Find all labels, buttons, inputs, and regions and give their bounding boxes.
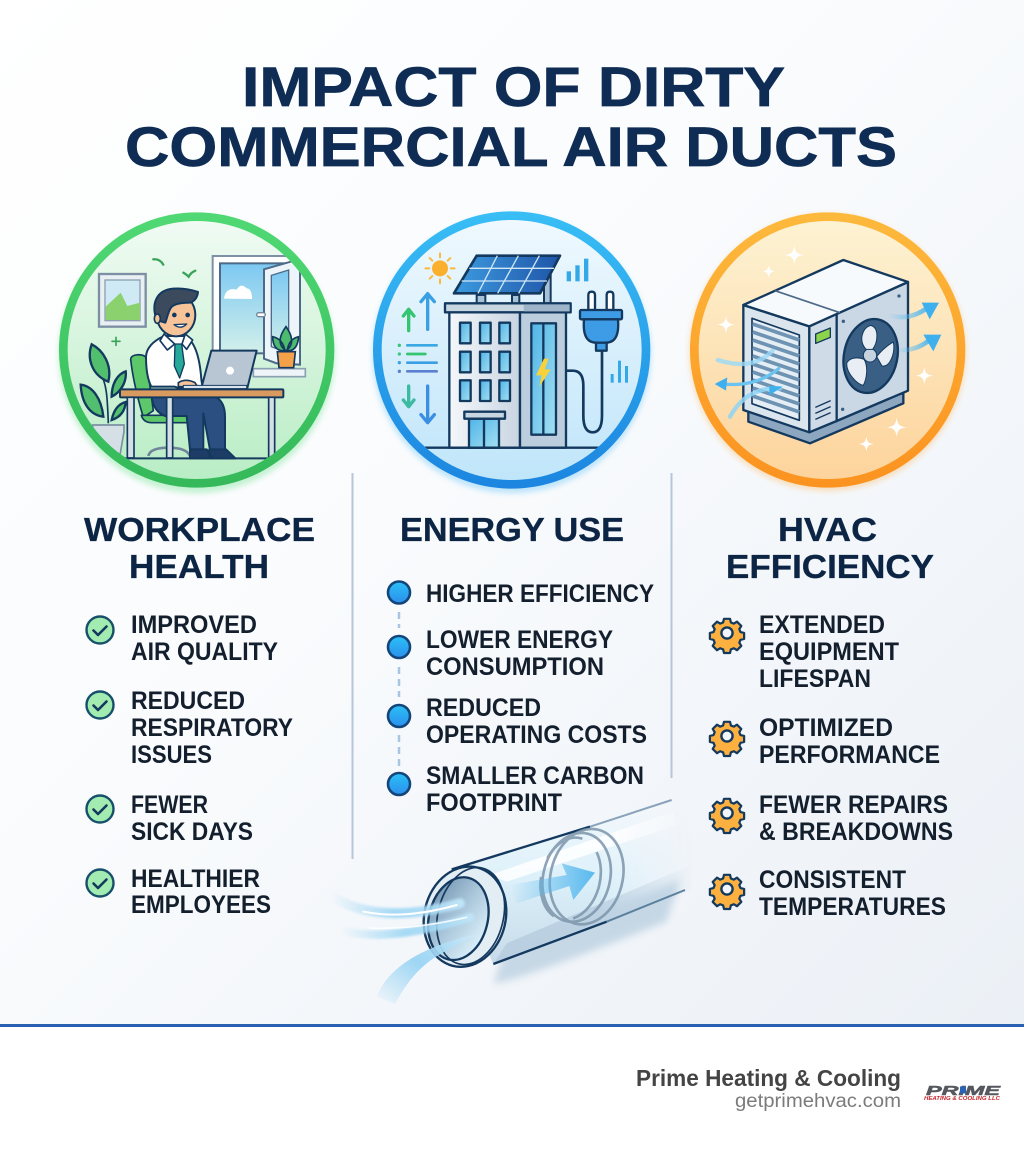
item: fewer repairs and breakdowns bbox=[710, 791, 953, 846]
panel: energy use column bbox=[388, 511, 654, 817]
item: extended equipment lifespan: LIFESPAN bbox=[759, 665, 871, 693]
item: consistent temperatures: CONSISTENT bbox=[759, 866, 906, 894]
panel: hvac efficiency illustration bbox=[689, 214, 966, 491]
duct opening bbox=[413, 858, 517, 976]
item: fewer sick days: SICK DAYS bbox=[131, 818, 253, 846]
air stream into duct bbox=[330, 895, 477, 1004]
item: reduced respiratory issues bbox=[86, 687, 293, 769]
icon: office worker bbox=[146, 288, 235, 458]
divider: right bbox=[670, 473, 672, 778]
heading: hvac efficiency: HVAC bbox=[778, 511, 877, 548]
item: reduced operating costs: REDUCED bbox=[426, 694, 541, 722]
item: smaller carbon footprint bbox=[388, 762, 644, 817]
item: optimized performance: OPTIMIZED bbox=[759, 714, 893, 742]
icon: hvac unit bbox=[743, 260, 908, 443]
item: improved air quality: IMPROVED bbox=[131, 611, 257, 639]
icon: plug and cable bbox=[566, 292, 622, 432]
arrow: airflow through duct bbox=[510, 863, 595, 903]
logo: prime heating and cooling bbox=[924, 1083, 1001, 1102]
icon: window bbox=[213, 256, 305, 377]
item: reduced respiratory issues: ISSUES bbox=[131, 741, 212, 769]
title: COMMERCIAL AIR DUCTS bbox=[125, 115, 897, 178]
item: consistent temperatures bbox=[710, 866, 946, 921]
timeline connector bbox=[398, 612, 400, 767]
icon: sparkles bbox=[717, 245, 933, 451]
item: lower energy consumption bbox=[388, 626, 613, 681]
item: healthier employees: EMPLOYEES bbox=[131, 891, 271, 919]
title bbox=[125, 55, 897, 178]
item: extended equipment lifespan: EXTENDED bbox=[759, 611, 885, 639]
item: optimized performance bbox=[710, 714, 940, 769]
icon: lightning bolt bbox=[536, 359, 551, 387]
icon: birds and sparkle bbox=[112, 259, 195, 345]
item: improved air quality: AIR QUALITY bbox=[131, 638, 278, 666]
item: fewer repairs and breakdowns: & BREAKDOWNS bbox=[759, 818, 953, 846]
heading: workplace health: HEALTH bbox=[129, 548, 269, 585]
item: lower energy consumption: LOWER ENERGY bbox=[426, 626, 613, 654]
heading: energy use: ENERGY USE bbox=[400, 511, 624, 548]
item: reduced respiratory issues: RESPIRATORY bbox=[131, 714, 293, 742]
icon: desk bbox=[103, 389, 290, 458]
item: reduced operating costs: OPERATING COSTS bbox=[426, 721, 647, 749]
item: reduced operating costs bbox=[388, 694, 647, 749]
panel: energy use illustration bbox=[372, 215, 651, 493]
icon: solar panel bbox=[454, 256, 560, 305]
icon: window plant bbox=[273, 327, 299, 368]
item: fewer repairs and breakdowns: FEWER REPAIRS bbox=[759, 791, 948, 819]
heading: hvac efficiency bbox=[726, 511, 934, 585]
item: optimized performance: PERFORMANCE bbox=[759, 741, 940, 769]
logo: prime heating and cooling: PRIME bbox=[926, 1083, 1001, 1098]
footer band bbox=[0, 1024, 1024, 1154]
icon: office building bbox=[425, 303, 600, 448]
heading: workplace health bbox=[84, 511, 315, 585]
panel: hvac efficiency column bbox=[710, 511, 953, 921]
item: improved air quality bbox=[86, 611, 278, 666]
item: extended equipment lifespan bbox=[710, 611, 899, 693]
icon: office chair bbox=[131, 355, 190, 456]
item: smaller carbon footprint: SMALLER CARBON bbox=[426, 762, 644, 790]
heading: hvac efficiency: EFFICIENCY bbox=[726, 548, 934, 585]
item: reduced respiratory issues: REDUCED bbox=[131, 687, 245, 715]
icon: laptop bbox=[183, 351, 257, 389]
heading: workplace health: WORKPLACE bbox=[84, 511, 315, 548]
icon: small bar charts bbox=[567, 259, 628, 383]
item: fewer sick days bbox=[86, 791, 253, 846]
logo: prime heating and cooling: HEATING & COOLING LLC bbox=[924, 1096, 1000, 1102]
item: lower energy consumption: CONSUMPTION bbox=[426, 653, 604, 681]
panel: workplace health illustration bbox=[58, 217, 335, 493]
item: higher efficiency: HIGHER EFFICIENCY bbox=[426, 580, 654, 608]
illustration: clean air duct bbox=[330, 798, 693, 1004]
item: consistent temperatures: TEMPERATURES bbox=[759, 893, 946, 921]
panel: workplace health column bbox=[84, 511, 315, 919]
divider: left bbox=[352, 473, 354, 859]
title: IMPACT OF DIRTY bbox=[242, 55, 785, 118]
footer website: getprimehvac.com bbox=[735, 1091, 901, 1112]
icon: wall picture bbox=[99, 274, 146, 327]
icon: usage list dots bbox=[398, 344, 401, 373]
icon: usage arrows and lines bbox=[403, 294, 437, 423]
item: extended equipment lifespan: EQUIPMENT bbox=[759, 638, 899, 666]
item: fewer sick days: FEWER bbox=[131, 791, 208, 819]
footer brand name: Prime Heating & Cooling bbox=[636, 1065, 901, 1091]
item: healthier employees: HEALTHIER bbox=[131, 865, 260, 893]
icon: airflow arrows bbox=[715, 303, 941, 417]
item: smaller carbon footprint: FOOTPRINT bbox=[426, 789, 562, 817]
item: healthier employees bbox=[86, 865, 271, 919]
icon: floor plant bbox=[81, 344, 126, 455]
icon: sun bbox=[425, 253, 455, 283]
